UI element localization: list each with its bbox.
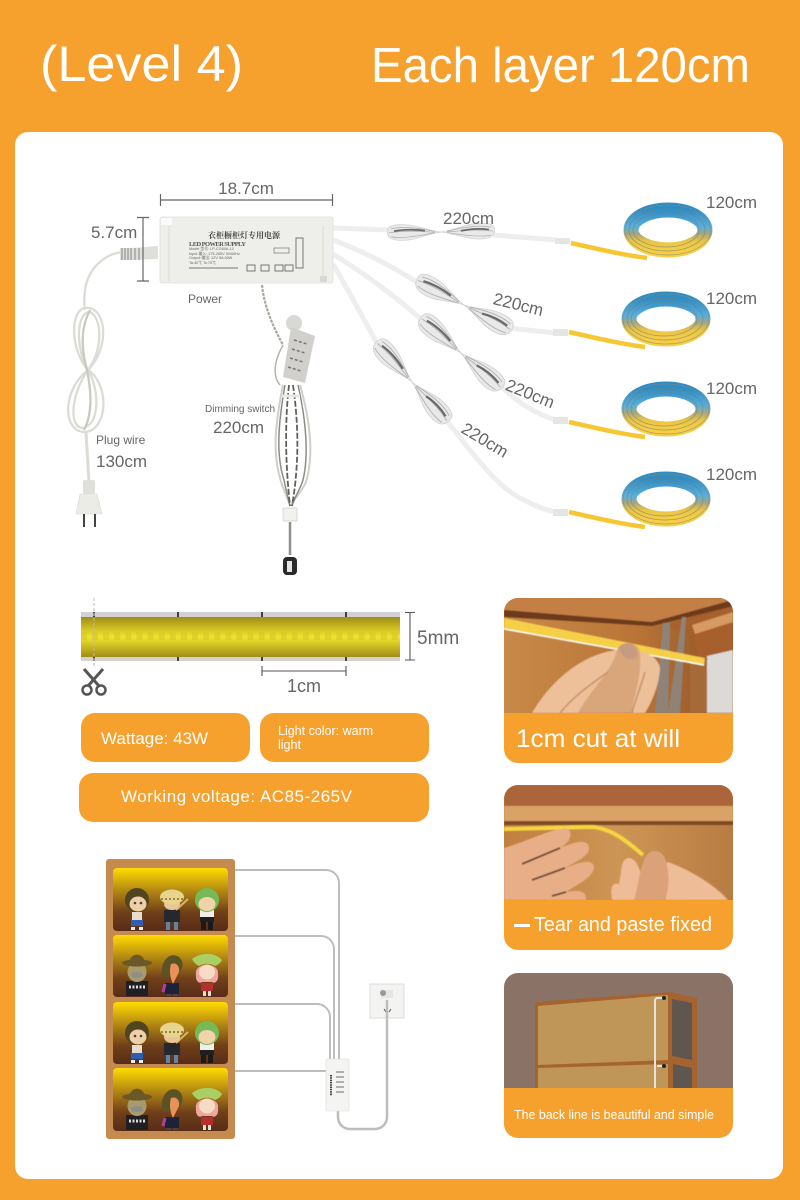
label: plug wire length: 130cm bbox=[96, 452, 147, 471]
label: height: 5.7cm bbox=[91, 223, 137, 242]
card: tear and paste bbox=[504, 785, 733, 950]
shelf 4 bbox=[113, 1068, 228, 1131]
dimension: cut interval bbox=[262, 666, 346, 676]
spec: wattage bbox=[81, 713, 250, 762]
dimming switch wiring bbox=[262, 285, 310, 555]
shelf 1 bbox=[113, 868, 228, 931]
label: strip width: 5mm bbox=[417, 628, 459, 649]
label: strip 3 length: 120cm bbox=[706, 379, 757, 398]
dimming switch module bbox=[283, 315, 315, 383]
caption bar bbox=[504, 1088, 733, 1138]
dimming button sensor bbox=[283, 557, 297, 575]
label: wire 1 length: 220cm bbox=[443, 209, 494, 228]
dimming connector bbox=[283, 508, 297, 521]
dimension: strip width bbox=[405, 612, 415, 660]
power supply box bbox=[160, 217, 333, 283]
LED strip coil 1 bbox=[571, 205, 711, 258]
driver box bbox=[326, 1059, 349, 1111]
wire bundles bbox=[369, 223, 516, 428]
spec: light color: light bbox=[278, 738, 301, 752]
title: layer length: Each layer 120cm bbox=[371, 39, 750, 93]
LED strip coil 4 bbox=[569, 474, 709, 527]
label: dimming switch length: 220cm bbox=[213, 418, 264, 437]
power supply box: LED POWER SUPPLY bbox=[189, 241, 246, 248]
spec: wattage: Wattage: 43W bbox=[101, 729, 208, 748]
power supply box: Input 输入: 175-265V 50/60Hz bbox=[189, 251, 240, 256]
plug connector bbox=[120, 246, 158, 260]
shelf 3 bbox=[113, 1002, 228, 1064]
photo: cabinet back wiring bbox=[504, 973, 733, 1088]
icon: scissors bbox=[82, 669, 106, 694]
label: strip 2 length: 120cm bbox=[706, 289, 757, 308]
power supply box: Ta:40℃ Tc:75℃ bbox=[189, 261, 216, 265]
caption bar bbox=[504, 713, 733, 763]
LED strip close-up bbox=[81, 598, 400, 668]
spec: working voltage: Working voltage: AC85-265V bbox=[121, 787, 353, 806]
dimension line: height bbox=[137, 218, 149, 281]
power supply box: 衣柜橱柜灯专用电源 bbox=[208, 230, 281, 241]
title: level: (Level 4) bbox=[40, 36, 243, 92]
card: cut at will bbox=[504, 598, 733, 763]
label: dimming switch: Dimming switch bbox=[205, 404, 275, 415]
label: strip 1 length: 120cm bbox=[706, 193, 757, 212]
spec: light color: Light color: warm bbox=[278, 724, 373, 738]
label: wire 2 length: 220cm bbox=[491, 289, 545, 320]
mains plug bbox=[76, 480, 102, 527]
wire connectors bbox=[553, 238, 570, 516]
dimension line: width bbox=[160, 194, 332, 206]
label: power: Power bbox=[188, 292, 222, 306]
power supply box: Model 型号: LP-CG60A-12 bbox=[189, 246, 234, 251]
cabinet frame bbox=[106, 859, 235, 1139]
spec: light color bbox=[260, 713, 429, 762]
card: back line bbox=[504, 973, 733, 1138]
output wires bbox=[333, 228, 556, 512]
wiring lines bbox=[235, 870, 387, 1129]
caption: 1cm cut at will bbox=[516, 725, 680, 753]
power cable and coil bbox=[68, 252, 122, 482]
label: wire 4 length: 220cm bbox=[458, 419, 512, 462]
photo: strip being cut bbox=[504, 598, 733, 713]
wall socket bbox=[370, 984, 404, 1018]
diagram: product kit bbox=[68, 179, 757, 575]
label: width: 18.7cm bbox=[218, 179, 274, 198]
label: cut interval: 1cm bbox=[287, 676, 321, 696]
label: wire 3 length: 220cm bbox=[503, 376, 557, 412]
diagram: cabinet wiring bbox=[106, 859, 404, 1139]
icon: dash bbox=[514, 924, 530, 927]
label: strip 4 length: 120cm bbox=[706, 465, 757, 484]
caption: Tear and paste fixed bbox=[534, 914, 712, 936]
label: plug wire: Plug wire bbox=[96, 433, 146, 447]
caption: The back line is beautiful and simple bbox=[514, 1108, 714, 1122]
LED strip coil 2 bbox=[569, 294, 709, 347]
LED strip coil 3 bbox=[569, 384, 709, 437]
power supply box: Output 输出: 12V 5A 60W bbox=[189, 255, 233, 260]
caption bar bbox=[504, 900, 733, 950]
photo: hands pressing strip bbox=[504, 785, 733, 900]
spec: working voltage bbox=[79, 773, 429, 822]
shelf 2 bbox=[113, 935, 228, 997]
